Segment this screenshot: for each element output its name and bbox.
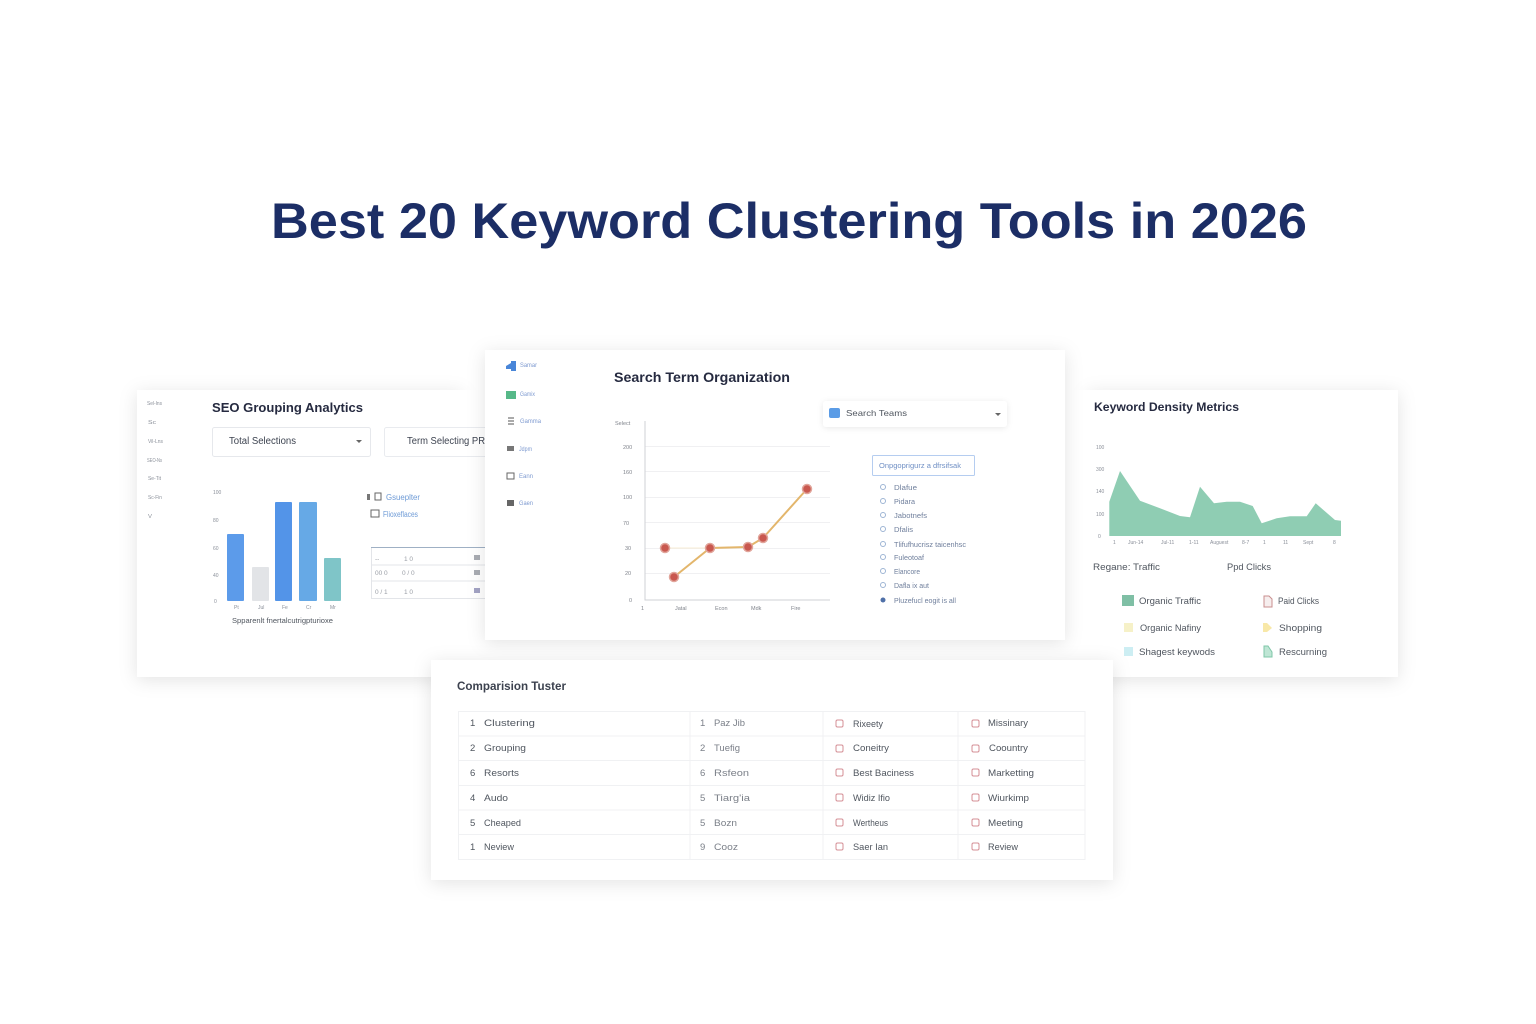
dropdown: total selections <box>212 428 370 456</box>
line chart: 200 <box>623 445 632 451</box>
table column 1: Audo <box>484 793 508 804</box>
dropdown: search teams <box>823 401 1007 427</box>
area chart: 1 <box>1263 540 1266 546</box>
area chart: Jun-14 <box>1128 540 1144 546</box>
dropdown: total selections: Total Selections <box>229 436 296 447</box>
filter list: Dlafue <box>894 485 917 492</box>
table column 4: Missinary <box>988 718 1028 729</box>
line chart: Fire <box>791 606 800 612</box>
bar chart: Pt <box>234 605 239 611</box>
table column 2: Tuefig <box>714 743 740 754</box>
sidebar navigation: Gaen <box>519 501 533 507</box>
table column 4: Marketting <box>988 768 1034 779</box>
filter list: Pidara <box>894 499 915 506</box>
mini table: 00 0 <box>375 570 388 577</box>
area chart: 0 <box>1098 534 1101 540</box>
bar chart: 0 <box>214 599 217 605</box>
table column 1: 4 <box>470 793 475 804</box>
chart labels: Regane: Traffic <box>1093 562 1160 573</box>
panel: SEO grouping analytics <box>137 390 514 677</box>
table column 4: Wiurkimp <box>988 793 1029 804</box>
filter list: Dfalis <box>894 527 914 534</box>
bar chart: 100 <box>213 490 222 496</box>
mini table: 1 0 <box>404 589 413 596</box>
table column 2: Paz Jib <box>714 718 745 729</box>
legend: Paid Clicks <box>1278 596 1319 607</box>
sidebar navigation: Samar <box>520 363 537 369</box>
table column 4 <box>972 718 1034 853</box>
filter list: Jabotnefs <box>894 513 928 520</box>
sidebar navigation: Jdpm <box>519 447 532 453</box>
area chart: Auguest <box>1210 540 1229 546</box>
area chart: Jul-11 <box>1161 540 1174 546</box>
area chart: Sept <box>1303 540 1314 546</box>
table column 1: 1 <box>470 842 475 853</box>
line chart: 20 <box>625 571 631 577</box>
area chart: 100 <box>1096 445 1105 451</box>
legend <box>1122 595 1327 658</box>
bar chart: Fe <box>282 605 288 611</box>
filter list: Elancore <box>894 569 920 576</box>
line chart: Select <box>615 421 631 427</box>
table column 3: Wertheus <box>853 818 888 829</box>
chart caption: Spparenlt fnertalcutrigpturioxe <box>232 616 333 625</box>
table column 1: Cheaped <box>484 818 521 829</box>
table column 1: 5 <box>470 818 475 829</box>
legend: Shopping <box>1279 623 1322 634</box>
line chart: Mdk <box>751 606 762 612</box>
sidebar labels: V <box>148 514 153 520</box>
heading: Keyword Density Metrics: Keyword Density Metrics <box>1094 400 1239 414</box>
table column 1: Grouping <box>484 743 526 754</box>
dropdown: term selecting: Term Selecting PR <box>407 436 485 447</box>
bar chart: 40 <box>213 573 219 579</box>
sidebar labels <box>147 401 163 520</box>
panel: search term organization <box>485 350 1065 640</box>
bar chart: Mr <box>330 605 336 611</box>
mini table <box>371 548 512 598</box>
table column 1: 6 <box>470 768 475 779</box>
filter list: Onpgoprigurz a dfrsifsak <box>879 461 961 470</box>
table column 3: Widiz Ifio <box>853 793 890 804</box>
mini table: 1 0 <box>404 556 413 563</box>
table column 2: Cooz <box>714 842 738 853</box>
legend: Organic Nafiny <box>1140 623 1201 634</box>
line chart <box>615 421 830 612</box>
area chart: 100 <box>1096 512 1105 518</box>
heading: Search Term Organization: Search Term Organization <box>614 370 790 385</box>
table column 4: Coountry <box>989 743 1028 754</box>
sidebar labels: SEO-Ns <box>147 458 162 464</box>
line chart: Econ <box>715 606 728 612</box>
table column 1: Clustering <box>484 718 535 729</box>
panel: comparison table <box>431 660 1113 880</box>
area chart: 11 <box>1283 540 1288 546</box>
filter list <box>872 456 974 605</box>
table column 2: 5 <box>700 818 705 829</box>
area chart: 300 <box>1096 467 1105 473</box>
bar chart <box>213 490 341 611</box>
bar chart: Jul <box>258 605 264 611</box>
table column 3: Coneitry <box>853 743 889 754</box>
line chart: 70 <box>623 521 629 527</box>
sidebar labels: Vil-Lns <box>148 439 163 445</box>
bar chart: 60 <box>213 546 219 552</box>
table column 1: Resorts <box>484 768 519 779</box>
table column 1: 1 <box>470 718 475 729</box>
sidebar navigation: Gamix <box>520 392 535 398</box>
line chart: 1 <box>641 606 644 612</box>
chart labels <box>1093 562 1271 573</box>
heading: Comparision Tuster: Comparision Tuster <box>457 679 566 693</box>
table column 1 <box>470 718 535 853</box>
table column 4: Review <box>988 842 1018 853</box>
mini table: 0 / 1 <box>375 589 388 596</box>
panel: keyword density metrics <box>1064 390 1398 677</box>
table column 2: 9 <box>700 842 705 853</box>
table column 1: 2 <box>470 743 475 754</box>
line chart: 0 <box>629 598 632 604</box>
bar chart: Cr <box>306 605 312 611</box>
sidebar labels: Sc-Fin <box>148 495 162 501</box>
table column 3: Saer Ian <box>853 842 888 853</box>
line chart: 30 <box>625 546 631 552</box>
sidebar labels: Sel-Ins <box>147 401 162 407</box>
filter list: Dafla ix aut <box>894 583 929 590</box>
mini table: 0 / 0 <box>402 570 415 577</box>
table column 2 <box>700 718 751 853</box>
table column 3 <box>836 719 914 853</box>
line chart: Jatal <box>675 606 687 612</box>
filter list: Tlifufhucrisz taicenhsc <box>894 542 967 549</box>
area chart: 1 <box>1113 540 1116 546</box>
sidebar navigation: Gamma <box>520 419 542 425</box>
legend links: Gsueplter <box>386 493 420 502</box>
sidebar labels: Se-Tit <box>148 476 162 482</box>
legend links: Flioxeflaces <box>383 510 418 519</box>
area chart <box>1096 445 1341 546</box>
table column 2: 6 <box>700 768 705 779</box>
area chart: 8 <box>1333 540 1336 546</box>
table column 2: 5 <box>700 793 705 804</box>
mini table: -- <box>375 556 379 563</box>
heading: SEO Grouping Analytics: SEO Grouping Analytics <box>212 400 363 415</box>
legend: Shagest keywods <box>1139 647 1215 658</box>
sidebar labels: Sc <box>148 420 157 426</box>
chart labels: Ppd Clicks <box>1227 562 1271 573</box>
table column 3: Rixeety <box>853 719 883 730</box>
dropdown: term selecting <box>384 428 514 456</box>
title: Best 20 Keyword Clustering Tools in 2026 <box>271 193 1307 249</box>
table column 2: 2 <box>700 743 705 754</box>
table column 1: Neview <box>484 842 514 853</box>
table column 4: Meeting <box>988 818 1023 829</box>
filter list: Fuleotoaf <box>894 555 924 562</box>
area chart: 1-11 <box>1189 540 1199 546</box>
legend: Rescurning <box>1279 647 1327 658</box>
area chart: 8-7 <box>1242 540 1249 546</box>
table column 2: Tiarg'ia <box>714 793 751 804</box>
line chart: 100 <box>623 495 632 501</box>
area chart: 140 <box>1096 489 1105 495</box>
table column 3: Best Baciness <box>853 768 914 779</box>
table column 2: Bozn <box>714 818 737 829</box>
legend links <box>367 493 420 519</box>
sidebar navigation <box>506 361 542 507</box>
table grid <box>458 711 1085 860</box>
bar chart: 80 <box>213 518 219 524</box>
dropdown: search teams: Search Teams <box>846 408 907 418</box>
filter list: Pluzefucl eogit is all <box>894 598 956 605</box>
table column 2: Rsfeon <box>714 768 749 779</box>
table column 2: 1 <box>700 718 705 729</box>
sidebar navigation: Eann <box>519 474 533 480</box>
line chart: 160 <box>623 470 632 476</box>
legend: Organic Traffic <box>1139 596 1201 607</box>
